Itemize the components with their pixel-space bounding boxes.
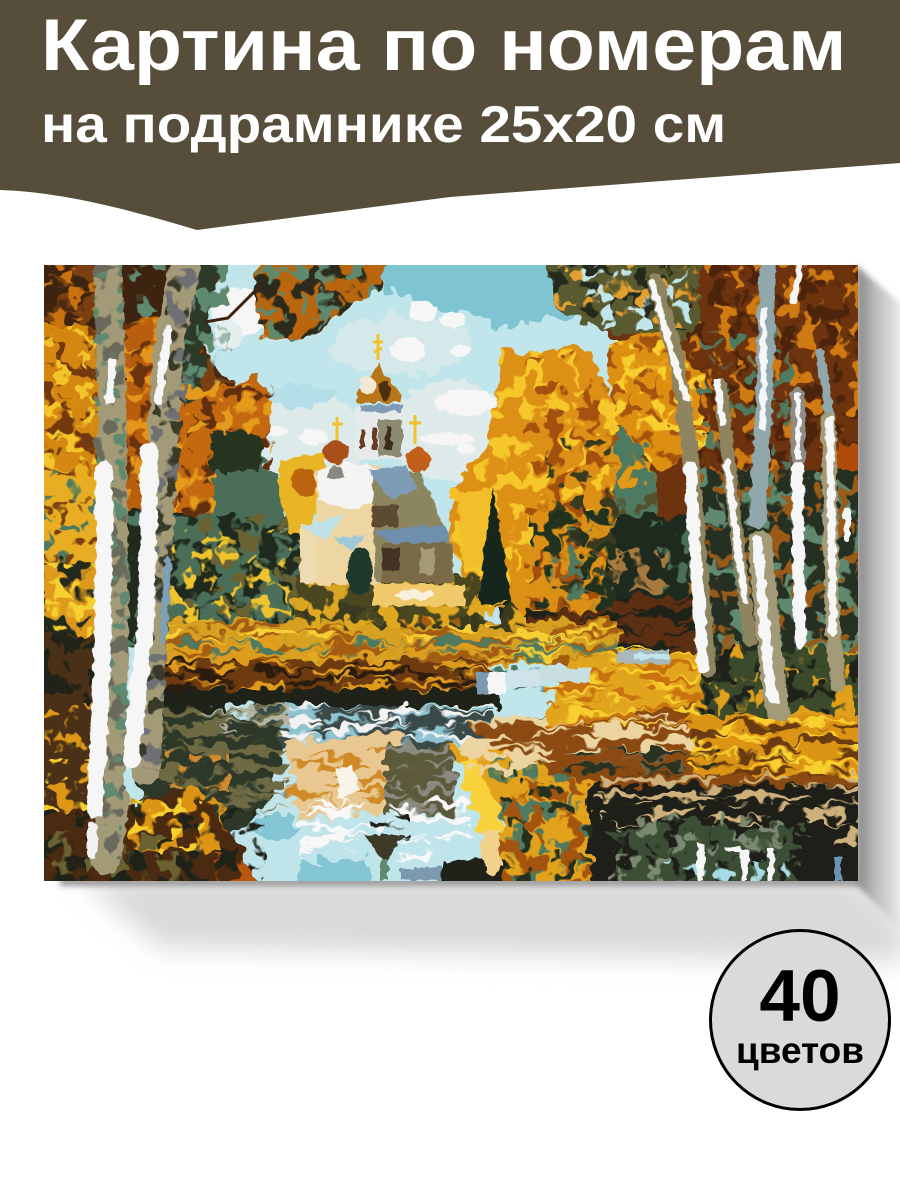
river with reflections	[225, 705, 495, 895]
golden tree near the sky	[607, 330, 700, 470]
white trunk reflections	[697, 843, 774, 881]
sky and clouds	[122, 265, 620, 839]
dark left river bank	[140, 705, 290, 830]
dark grove	[602, 512, 689, 602]
stream waterfall	[476, 650, 842, 881]
dark fir tree	[478, 488, 512, 605]
badge: 40 colours	[709, 929, 891, 1111]
dark bank behind the stream	[500, 598, 700, 660]
thin branch	[205, 284, 262, 322]
badge number: 40	[759, 956, 841, 1037]
left forest	[44, 265, 302, 648]
church reflection in the water	[336, 765, 450, 881]
dark shrubs around the church base	[295, 575, 480, 630]
big golden tree right of the church	[445, 345, 618, 612]
badge label: цветов	[736, 1030, 864, 1071]
header banner	[0, 0, 900, 230]
golden crosses	[332, 334, 421, 444]
green foliage	[167, 450, 300, 625]
birch trunks left	[90, 265, 200, 860]
sunlit path	[373, 584, 465, 606]
birch trunks right	[652, 265, 847, 710]
golden reflection and lower right foliage	[440, 742, 598, 881]
foliage between the birches	[122, 300, 172, 510]
title: Картина по номерам	[41, 5, 846, 86]
bottom-left foliage	[44, 785, 267, 881]
brown-orange canopy	[686, 265, 858, 472]
foliage right of the birches	[179, 265, 220, 404]
green middle	[612, 426, 658, 518]
top canopy	[546, 265, 703, 342]
meadow	[150, 605, 620, 712]
left lower column	[44, 632, 95, 814]
subtitle: на подрамнике 25х20 см	[41, 96, 726, 154]
left gold tree behind church	[278, 452, 325, 535]
painting: autumn church by the river	[44, 265, 858, 881]
right forest	[498, 265, 858, 656]
top branch foliage	[255, 250, 385, 338]
dark water lower right	[585, 770, 858, 881]
left column gold foliage	[44, 322, 100, 477]
church	[300, 362, 453, 596]
right river bank	[465, 650, 880, 790]
